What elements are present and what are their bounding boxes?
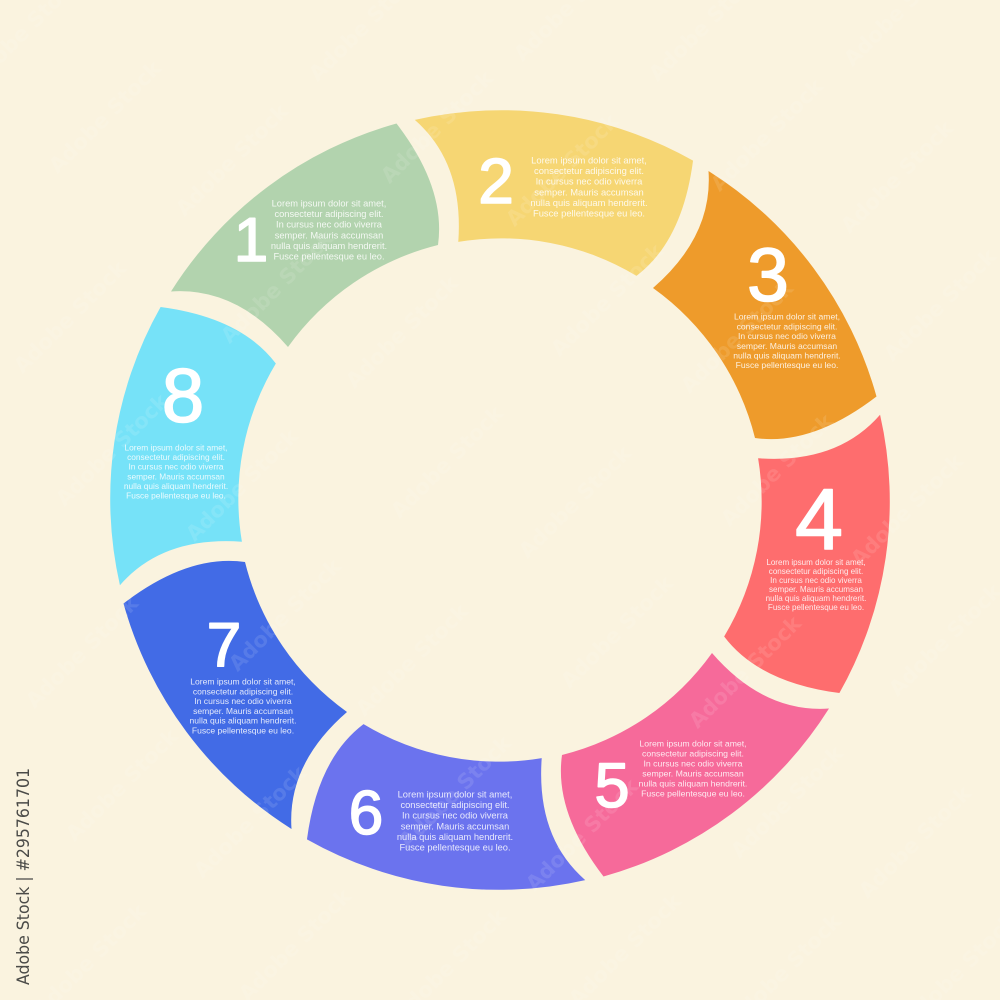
text block 1: In cursus nec odio viverra — [276, 220, 383, 230]
watermark pattern: Adobe Stock — [501, 108, 624, 231]
watermark pattern: Adobe Stock — [216, 225, 339, 348]
text block 3: Lorem ipsum dolor sit amet, — [734, 312, 840, 322]
watermark pattern: Adobe Stock — [726, 740, 849, 863]
panel: segment 4 — [651, 376, 999, 723]
panel: segment 3 — [653, 171, 876, 439]
text block 7: consectetur adipiscing elit. — [193, 686, 293, 696]
text block 7: nulla quis aliquam hendrerit. — [190, 716, 296, 726]
text block 3: semper. Mauris accumsan — [737, 341, 837, 351]
watermark pattern: Adobe Stock — [386, 400, 509, 523]
watermark pattern: Adobe Stock — [879, 243, 1000, 366]
watermark pattern: Adobe Stock — [546, 238, 669, 361]
shape: segment 6 — [277, 651, 624, 999]
number 8: 8 — [162, 354, 204, 439]
text block 4: nulla quis aliquam hendrerit. — [766, 594, 866, 603]
text block 4: Fusce pellentesque eu leo. — [768, 603, 864, 612]
text block 3: In cursus nec odio viverra — [738, 331, 836, 341]
text block 1: Fusce pellentesque eu leo. — [273, 252, 385, 262]
text block 6: Lorem ipsum dolor sit amet, — [398, 790, 512, 800]
watermark pattern: Adobe Stock — [706, 73, 829, 196]
panel: segment 2 — [376, 1, 723, 349]
text block 2: Fusce pellentesque eu leo. — [533, 208, 645, 218]
number 1: 1 — [234, 206, 268, 275]
text block 1: semper. Mauris accumsan — [275, 230, 383, 240]
text block 6: consectetur adipiscing elit. — [400, 800, 510, 810]
text block 8: semper. Mauris accumsan — [127, 471, 225, 481]
text block 7: Lorem ipsum dolor sit amet, — [190, 676, 296, 686]
text block 8: Fusce pellentesque eu leo. — [126, 490, 226, 500]
watermark pattern: Adobe Stock — [51, 388, 174, 511]
watermark pattern: Adobe Stock — [21, 590, 144, 713]
watermark pattern: Adobe Stock — [684, 610, 807, 733]
text block 6: nulla quis aliquam hendrerit. — [397, 832, 513, 842]
text block 6: In cursus nec odio viverra — [402, 811, 509, 821]
watermark pattern: Adobe Stock — [394, 730, 517, 853]
text block 5: nulla quis aliquam hendrerit. — [639, 778, 747, 788]
text block 4: consectetur adipiscing elit. — [769, 567, 863, 576]
number 3: 3 — [747, 233, 789, 317]
shape: segment 8 — [1, 277, 349, 624]
watermark pattern: Adobe Stock — [224, 553, 347, 676]
shape: segment 1 — [171, 124, 439, 347]
text block 5: consectetur adipiscing elit. — [642, 748, 744, 758]
panel: segment 7 — [124, 561, 347, 829]
watermark pattern: Adobe Stock — [351, 598, 474, 721]
panel: segment 5 — [561, 653, 829, 876]
shape: segment 4 — [651, 376, 999, 723]
text block 8: Lorem ipsum dolor sit amet, — [125, 442, 227, 452]
number 7: 7 — [207, 611, 241, 680]
watermark pattern: Adobe Stock — [521, 773, 644, 896]
text block 4: Lorem ipsum dolor sit amet, — [766, 558, 866, 567]
shape: segment 7 — [124, 561, 347, 829]
panel: segment 6 — [277, 651, 624, 999]
text block 3: Fusce pellentesque eu leo. — [736, 360, 838, 370]
shape: segment 5 — [561, 653, 829, 876]
text block 8: In cursus nec odio viverra — [128, 462, 224, 472]
watermark pattern: Adobe Stock — [189, 760, 312, 883]
stock id side label: Adobe Stock | #295761701 — [14, 768, 34, 985]
text block 5: Lorem ipsum dolor sit amet, — [639, 738, 747, 748]
text block 2: Lorem ipsum dolor sit amet, — [531, 154, 647, 166]
text block 2: nulla quis aliquam hendrerit. — [530, 197, 648, 208]
text block 6: semper. Mauris accumsan — [401, 821, 509, 831]
text block 1: Lorem ipsum dolor sit amet, — [272, 198, 386, 208]
text block 4: In cursus nec odio viverra — [770, 576, 862, 585]
text block 7: semper. Mauris accumsan — [193, 706, 293, 716]
watermark pattern: Adobe Stock — [676, 275, 799, 398]
panel: segment 8 — [1, 277, 349, 624]
watermark pattern: Adobe Stock — [44, 55, 167, 178]
text block 7: Fusce pellentesque eu leo. — [192, 726, 294, 736]
shape: segment 3 — [653, 171, 876, 439]
text block 5: Fusce pellentesque eu leo. — [641, 788, 745, 798]
watermark pattern: Adobe Stock — [9, 255, 132, 378]
watermark pattern: Adobe Stock — [854, 780, 977, 903]
watermark pattern: Adobe Stock — [171, 98, 294, 221]
watermark pattern: Adobe Stock — [836, 115, 959, 238]
text block 3: consectetur adipiscing elit. — [737, 321, 837, 331]
number 4: 4 — [795, 472, 843, 568]
watermark pattern: Adobe Stock — [846, 448, 969, 571]
text block 6: Fusce pellentesque eu leo. — [399, 842, 511, 852]
watermark pattern: Adobe Stock — [61, 723, 184, 846]
text block 3: nulla quis aliquam hendrerit. — [733, 350, 841, 360]
text block 4: semper. Mauris accumsan — [769, 585, 863, 594]
text block 5: semper. Mauris accumsan — [642, 768, 744, 778]
number 5: 5 — [594, 751, 630, 821]
watermark pattern: Adobe Stock — [341, 270, 464, 393]
text block 2: semper. Mauris accumsan — [534, 186, 644, 197]
watermark pattern: Adobe Stock — [181, 423, 304, 546]
number 2: 2 — [478, 145, 514, 217]
watermark pattern: Adobe Stock — [376, 65, 499, 188]
panel: segment 1 — [171, 124, 439, 347]
shape: segment 2 — [376, 1, 723, 349]
text block 1: nulla quis aliquam hendrerit. — [271, 241, 387, 251]
text block 7: In cursus nec odio viverra — [194, 696, 292, 706]
watermark pattern: Adobe Stock — [514, 440, 637, 563]
text block 8: consectetur adipiscing elit. — [127, 452, 225, 462]
text block 8: nulla quis aliquam hendrerit. — [124, 481, 228, 491]
number 6: 6 — [349, 779, 383, 848]
text block 2: In cursus nec odio viverra — [536, 176, 643, 187]
text block 1: consectetur adipiscing elit. — [274, 209, 384, 219]
watermark pattern: Adobe Stock — [716, 408, 839, 531]
text block 2: consectetur adipiscing elit. — [534, 165, 644, 176]
text block 5: In cursus nec odio viverra — [644, 758, 743, 768]
watermark pattern: Adobe Stock — [556, 570, 679, 693]
